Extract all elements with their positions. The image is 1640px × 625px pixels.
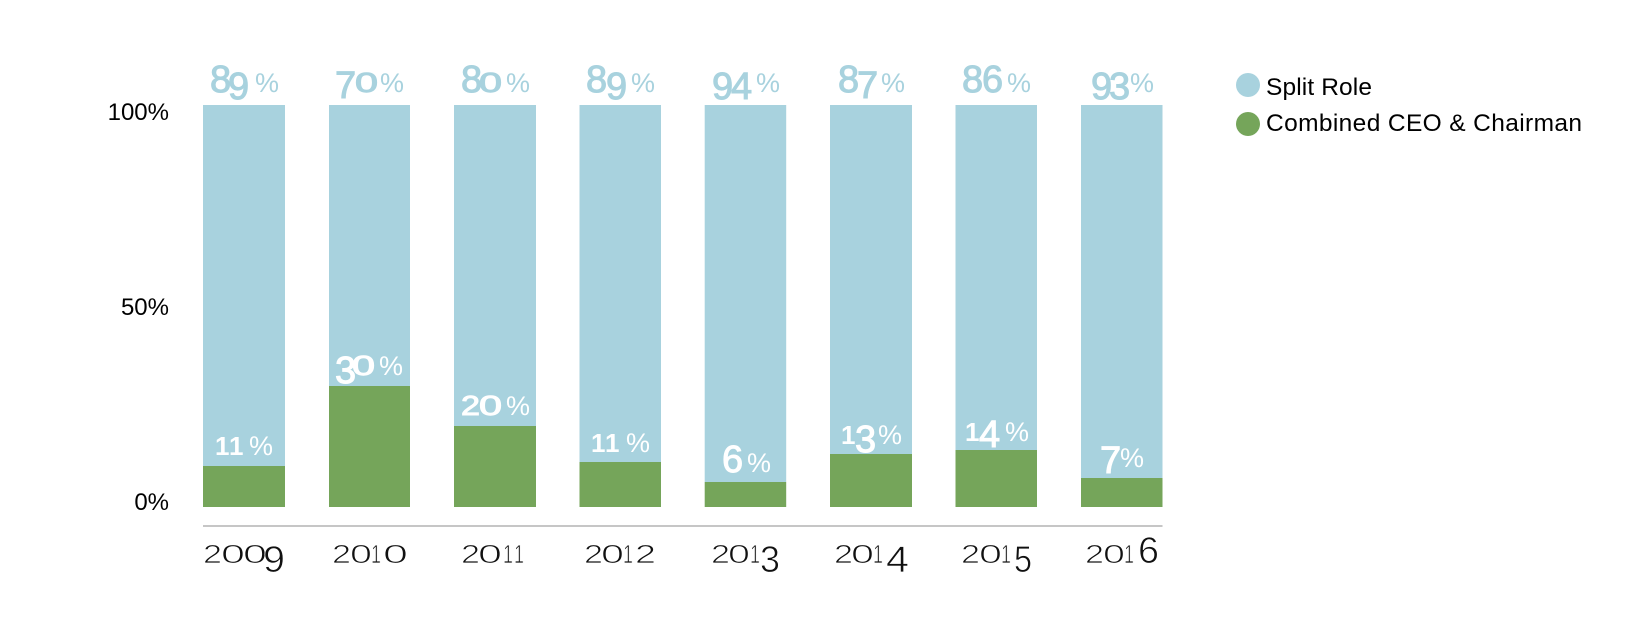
year labels: 2	[711, 539, 730, 569]
year labels: 2	[332, 539, 351, 569]
year labels: 1	[1001, 539, 1011, 569]
split role value labels: 8	[838, 59, 859, 101]
year labels: 2	[584, 539, 603, 569]
year labels: 1	[623, 539, 633, 569]
bar 2016	[1081, 105, 1162, 507]
combined role value labels: %	[506, 391, 530, 421]
split role value labels: 0	[479, 67, 502, 98]
year labels: 2	[635, 539, 656, 569]
year labels: 1	[750, 539, 760, 569]
split role value labels	[210, 59, 1154, 108]
legend item: combined CEO and chairman: Combined CEO & Chairman	[1266, 110, 1582, 137]
y axis labels: 0%	[134, 489, 169, 516]
split role value labels: 8	[586, 59, 607, 101]
y axis labels: 50%	[121, 294, 169, 321]
bar 2010	[329, 105, 410, 507]
year labels: 2	[203, 539, 222, 569]
split role value labels: 8	[461, 59, 482, 101]
year labels: 2	[834, 539, 853, 569]
year labels: 9	[263, 539, 285, 580]
year labels: 1	[514, 539, 524, 569]
bar 2015	[956, 105, 1037, 507]
split role value labels: 9	[606, 66, 627, 108]
year labels: 0	[350, 539, 372, 569]
combined role value labels: %	[379, 351, 403, 381]
combined role value labels: 1	[215, 431, 229, 461]
year labels: 0	[478, 539, 502, 569]
combined role value labels: 1	[965, 417, 979, 447]
y axis labels: 100%	[108, 99, 169, 126]
combined role value labels: %	[1005, 417, 1029, 447]
year labels: 6	[1138, 530, 1159, 571]
combined role value labels: 1	[591, 428, 605, 458]
combined role value labels: 2	[461, 390, 480, 421]
split role value labels: 9	[228, 66, 249, 108]
year labels: 0	[243, 539, 267, 569]
year labels: 5	[1014, 539, 1032, 580]
combined role value labels: 7	[1100, 440, 1121, 482]
combined role value labels	[215, 350, 1144, 482]
combined role value labels: 3	[855, 419, 876, 461]
y axis labels	[108, 99, 169, 516]
split role value labels: 8	[962, 59, 983, 101]
combined role value labels: %	[747, 448, 771, 478]
year labels: 0	[979, 539, 1002, 569]
year labels: 1	[371, 539, 381, 569]
combined role value labels: %	[878, 420, 902, 450]
year labels	[203, 530, 1159, 580]
split role value labels: %	[756, 68, 780, 98]
year labels: 0	[601, 539, 624, 569]
split role value labels: 7	[857, 65, 878, 107]
year labels: 3	[760, 539, 780, 580]
year labels: 1	[1124, 539, 1134, 569]
year labels: 4	[886, 539, 909, 580]
split role value labels: 9	[1091, 66, 1112, 108]
split role value labels: 0	[355, 67, 378, 98]
combined role value labels: 6	[722, 439, 743, 481]
year labels: 1	[873, 539, 883, 569]
combined role value labels: 1	[605, 428, 619, 458]
x axis line	[203, 525, 1162, 527]
combined role value labels: 3	[335, 350, 356, 392]
split role value labels: %	[1007, 68, 1031, 98]
bar 2009	[203, 105, 285, 507]
split role value labels: %	[1130, 68, 1154, 98]
year labels: 0	[221, 539, 245, 569]
split role value labels: 4	[731, 66, 752, 108]
year labels: 1	[503, 539, 513, 569]
bar 2012	[580, 105, 661, 507]
combined role value labels: 0	[479, 390, 502, 421]
year labels: 0	[383, 539, 408, 569]
combined role value labels: %	[626, 428, 650, 458]
year labels: 2	[961, 539, 980, 569]
year labels: 0	[851, 539, 874, 569]
combined role value labels: %	[249, 431, 273, 461]
bar 2011	[454, 105, 536, 507]
split role value labels: %	[380, 68, 404, 98]
split role value labels: 9	[712, 66, 733, 108]
legend item: split role: Split Role	[1266, 74, 1372, 101]
bar 2014	[830, 105, 912, 507]
split role value labels: %	[255, 68, 279, 98]
combined role value labels: %	[1120, 443, 1144, 473]
combined role value labels: 1	[841, 420, 855, 450]
year labels: 0	[728, 539, 750, 569]
combined role value labels: 1	[229, 431, 243, 461]
split role value labels: 6	[982, 59, 1003, 101]
split role value labels: %	[506, 68, 530, 98]
bar 2013	[705, 105, 786, 507]
split role value labels: %	[631, 68, 655, 98]
legend	[1236, 73, 1582, 137]
split role value labels: 7	[335, 65, 356, 107]
split role value labels: 8	[210, 59, 231, 101]
split role value labels: 3	[1109, 66, 1130, 108]
year labels: 2	[1085, 539, 1104, 569]
year labels: 0	[1103, 539, 1125, 569]
split role value labels: %	[881, 68, 905, 98]
combined role value labels: 0	[352, 350, 375, 381]
year labels: 2	[461, 539, 480, 569]
combined role value labels: 4	[979, 414, 1000, 456]
